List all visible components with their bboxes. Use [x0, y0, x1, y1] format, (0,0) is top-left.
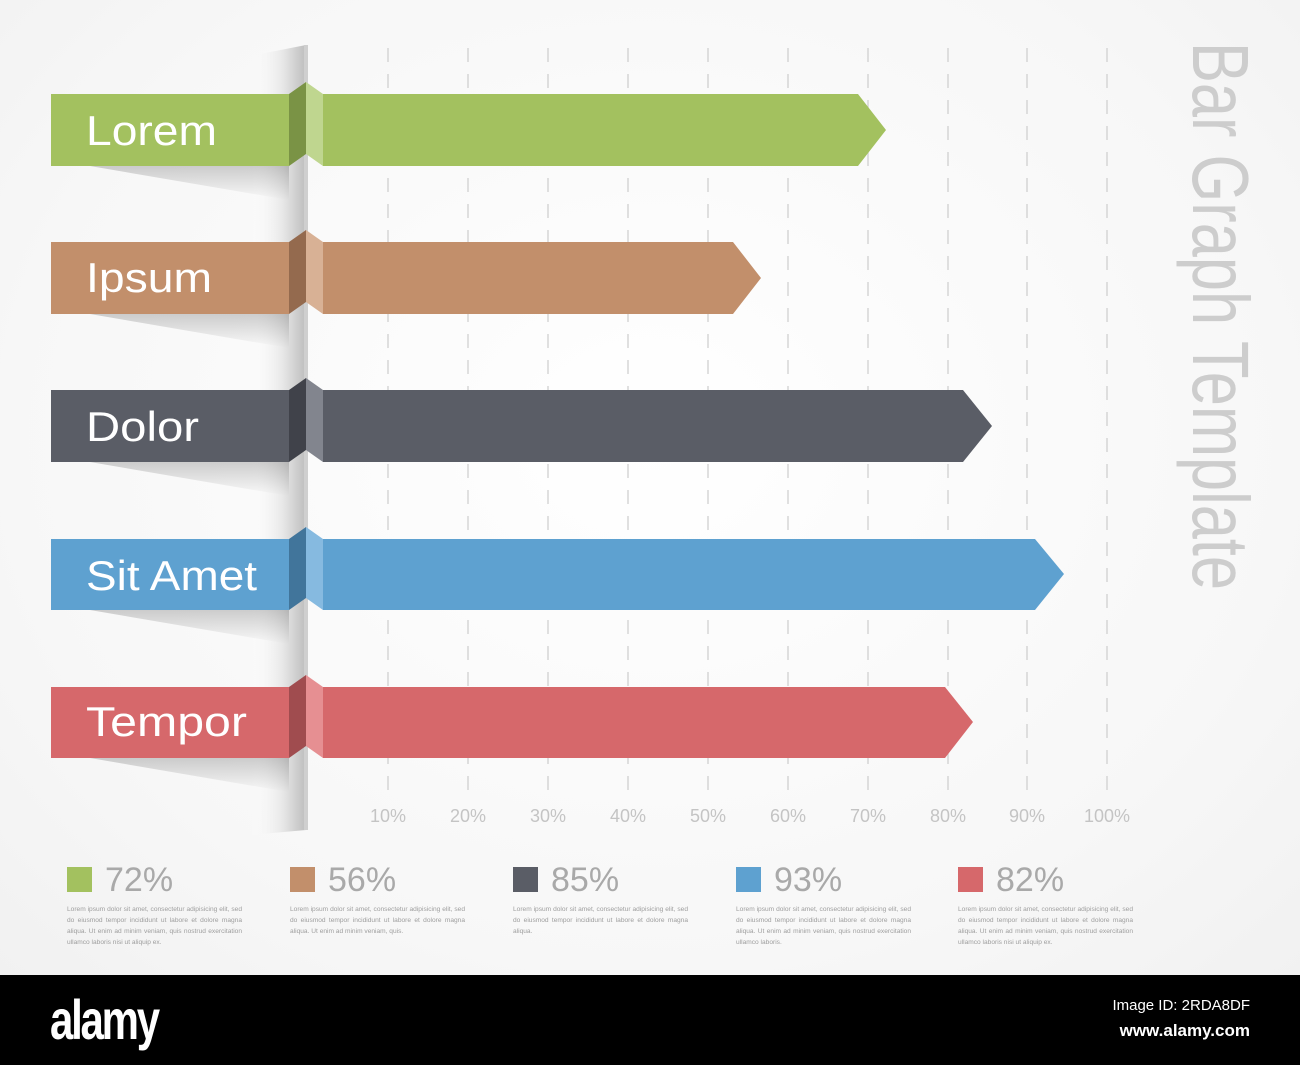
text: 56%	[328, 861, 396, 899]
axis labels: 80%	[930, 806, 966, 826]
bar: Sit Amet	[51, 527, 1064, 644]
axis labels: 10%	[370, 806, 406, 826]
bar: Sit Amet: Sit Amet	[86, 552, 257, 599]
axis labels: 90%	[1009, 806, 1045, 826]
legend: 82%	[958, 861, 1133, 946]
text: 82%	[996, 861, 1064, 899]
text: Lorem ipsum dolor sit amet, consectetur adipisicing elit, sed do eiusmod tempor incididunt ut labore et dolore magna aliqua. Ut enim ad minim veniam, quis nostrud exercitation ullamco laboris nisi ut aliquip ex.	[958, 906, 1133, 946]
axis labels: 60%	[770, 806, 806, 826]
bar: Ipsum	[51, 230, 761, 348]
axis labels: 30%	[530, 806, 566, 826]
vertical post	[250, 45, 308, 835]
axis labels: 40%	[610, 806, 646, 826]
bar: Lorem: Lorem	[86, 107, 217, 154]
url: www.alamy.com	[1120, 1021, 1250, 1040]
legend: 56%	[290, 861, 465, 935]
axis labels: 20%	[450, 806, 486, 826]
text: Lorem ipsum dolor sit amet, consectetur adipisicing elit, sed do eiusmod tempor incididunt ut labore et dolore magna aliqua.	[513, 906, 688, 935]
title: Bar Graph Template	[1176, 42, 1265, 590]
bar: Ipsum: Ipsum	[86, 254, 212, 301]
bar: Tempor	[51, 675, 973, 792]
legend: 72%	[67, 861, 242, 946]
text: 93%	[774, 861, 842, 899]
logo: alamy	[50, 988, 158, 1051]
axis labels: 70%	[850, 806, 886, 826]
text: Lorem ipsum dolor sit amet, consectetur adipisicing elit, sed do eiusmod tempor incididunt ut labore et dolore magna aliqua. Ut enim ad minim veniam, quis nostrud exercitation ullamco laboris nisi ut aliquip ex.	[67, 906, 242, 946]
legend: 93%	[736, 861, 911, 946]
axis labels: 50%	[690, 806, 726, 826]
bar: Dolor: Dolor	[86, 403, 199, 450]
text: Lorem ipsum dolor sit amet, consectetur adipisicing elit, sed do eiusmod tempor incididunt ut labore et dolore magna aliqua. Ut enim ad minim veniam, quis nostrud exercitation ullamco laboris.	[736, 906, 911, 946]
grid lines	[388, 48, 1107, 800]
bar: Lorem	[51, 82, 886, 200]
bar: Tempor: Tempor	[86, 698, 247, 745]
text: 85%	[551, 861, 619, 899]
axis labels	[370, 806, 1130, 826]
bar: Dolor	[51, 378, 992, 496]
image id: Image ID: 2RDA8DF	[1112, 997, 1250, 1014]
text: 72%	[105, 861, 173, 899]
footer banner	[0, 975, 1300, 1065]
text: Lorem ipsum dolor sit amet, consectetur adipisicing elit, sed do eiusmod tempor incididunt ut labore et dolore magna aliqua. Ut enim ad minim veniam, quis.	[290, 906, 465, 935]
axis labels: 100%	[1084, 806, 1130, 826]
legend: 85%	[513, 861, 688, 935]
